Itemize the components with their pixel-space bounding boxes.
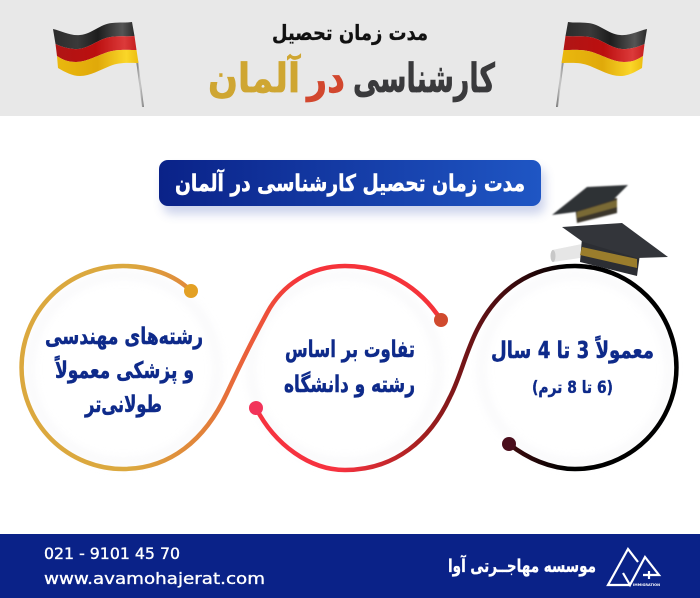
curve: red to black path xyxy=(256,266,676,470)
heading pill xyxy=(159,160,545,214)
header band xyxy=(0,0,700,116)
icon: left German flag xyxy=(53,22,144,107)
heading pill: مدت زمان تحصیل کارشناسی در آلمان xyxy=(175,168,525,197)
footer phone: 021 - 9101 45 70 xyxy=(44,544,180,563)
text: step one: معمولاً 3 تا 4 سال xyxy=(491,336,654,364)
footer website: www.avamohajerat.com xyxy=(44,569,265,588)
text: step three: و پزشکی معمولاً xyxy=(54,356,194,384)
header title: در xyxy=(305,56,345,102)
header title: آلمان xyxy=(208,53,301,102)
soft circle glows xyxy=(30,275,670,463)
text: step three: رشته‌های مهندسی xyxy=(45,324,203,350)
header subtitle: مدت زمان تحصیل xyxy=(272,21,428,45)
curve: gold to red path xyxy=(22,266,448,469)
icon: graduation caps and scroll xyxy=(550,185,668,276)
icon: Ava logo: IMMIGRATION xyxy=(633,583,660,587)
dot: dark step marker xyxy=(502,437,516,451)
text: step two: رشته و دانشگاه xyxy=(284,371,415,398)
dot: gold step marker xyxy=(184,284,198,298)
text: step three xyxy=(45,324,203,418)
header title xyxy=(208,53,495,102)
text: step two: تفاوت بر اساس xyxy=(285,337,415,363)
header title: کارشناسی xyxy=(353,56,495,102)
dot: orange-red step marker xyxy=(434,313,448,327)
icon: Ava logo xyxy=(608,549,660,587)
dot: pink step marker xyxy=(249,401,263,415)
text: step three: طولانی‌تر xyxy=(84,392,162,418)
footer band xyxy=(0,534,700,598)
text: step one: (6 تا 8 ترم) xyxy=(532,378,613,398)
text: step two xyxy=(284,337,415,398)
text: step one xyxy=(491,336,654,398)
icon: right German flag xyxy=(556,22,647,107)
footer organisation name: موسسه مهاجــرتی آوا xyxy=(448,554,596,577)
